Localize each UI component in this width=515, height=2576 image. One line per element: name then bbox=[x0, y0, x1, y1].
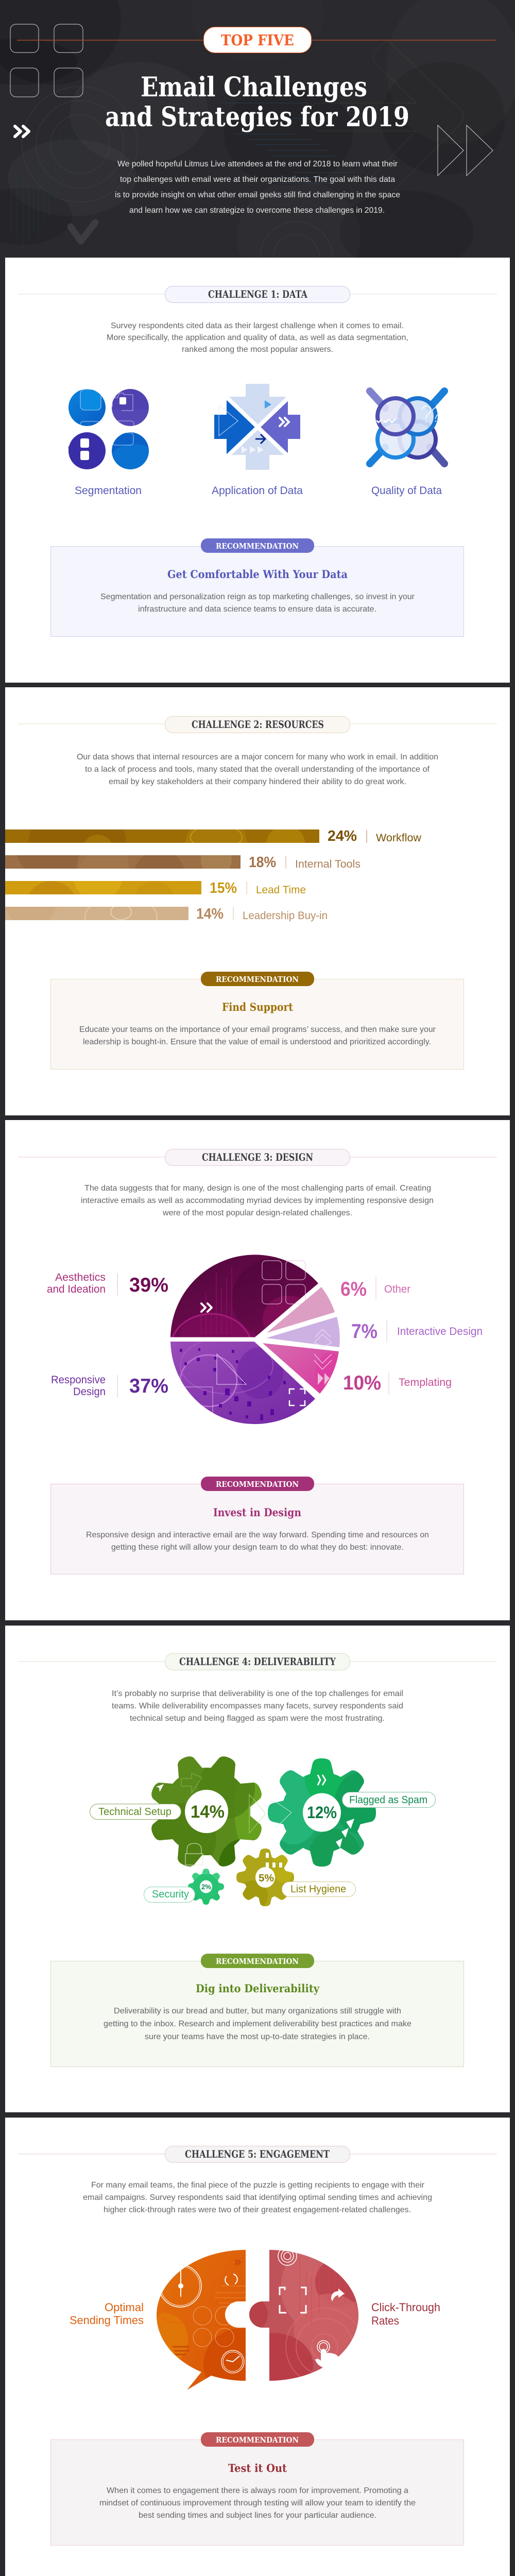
heading rule bbox=[17, 40, 496, 41]
pie chart bbox=[170, 1255, 344, 1424]
heading: challenge 2 bbox=[165, 716, 350, 733]
callout: recommendation 4: getting to the inbox. Research and implement deliverability best practices and make bbox=[104, 2020, 411, 2028]
intro text: top challenges with email were at their organizations. The goal with this data bbox=[120, 175, 395, 184]
heading: challenge 1 bbox=[165, 286, 350, 303]
slice: interactive design bbox=[266, 1317, 340, 1347]
label: click-through rates: Click-Through bbox=[371, 2301, 440, 2314]
callout: recommendation 1: Get Comfortable With Your Data bbox=[167, 568, 348, 581]
intro text: is to provide insight on what other email geeks still find challenging in the space bbox=[115, 191, 400, 199]
intro text bbox=[115, 160, 400, 215]
slice: other bbox=[267, 1287, 335, 1333]
label: other 6%: Other bbox=[384, 1283, 410, 1295]
callout: recommendation 5 bbox=[50, 2432, 464, 2545]
gear: security 2%: 2% bbox=[201, 1883, 212, 1891]
bar: lead time 15%: 15% bbox=[210, 880, 237, 896]
callout: recommendation 2: RECOMMENDATION bbox=[216, 975, 299, 984]
intro text: and learn how we can strategize to overcome these challenges in 2019. bbox=[129, 206, 385, 215]
text: challenge 3 intro: The data suggests that for many, design is one of the most challenging parts of email. Creating bbox=[84, 1184, 431, 1193]
bar: workflow 24%: Workflow bbox=[376, 832, 422, 844]
slice: responsive design bbox=[170, 1337, 315, 1424]
label: responsive design 37% bbox=[51, 1374, 168, 1398]
bar: leadership buy-in 14%: Leadership Buy-in bbox=[243, 910, 328, 922]
callout: recommendation 5: When it comes to engagement there is always room for improvement. Promoting a bbox=[107, 2486, 408, 2495]
panel: challenge 5 engagement bbox=[5, 2117, 510, 2576]
callout: recommendation 4: Dig into Deliverability bbox=[196, 1982, 320, 1995]
label: security bbox=[144, 1887, 195, 1902]
label: responsive design 37%: 37% bbox=[129, 1375, 168, 1397]
callout: recommendation 1 bbox=[50, 538, 464, 637]
callout: recommendation 3 bbox=[50, 1477, 464, 1574]
label: click-through rates: Rates bbox=[371, 2314, 399, 2327]
title: Email Challenges bbox=[141, 72, 367, 103]
icon: segmentation bbox=[68, 389, 149, 469]
label: other 6% bbox=[340, 1277, 410, 1300]
bar: internal tools 18%: Internal Tools bbox=[295, 858, 360, 870]
callout: recommendation 5: RECOMMENDATION bbox=[216, 2435, 299, 2445]
title bbox=[105, 72, 409, 133]
callout: recommendation 5: mindset of continuous improvement through testing will allow your team to identify the bbox=[99, 2499, 416, 2507]
label: templating 10% bbox=[343, 1372, 452, 1395]
label: security: Security bbox=[152, 1889, 189, 1900]
label: optimal sending times: Optimal bbox=[105, 2301, 144, 2314]
text: challenge 4 intro: technical setup and being flagged as spam were the most frustrating. bbox=[130, 1714, 385, 1723]
decorative icons: arrows on slices bbox=[314, 1329, 332, 1369]
bar: workflow 24% bbox=[5, 829, 421, 843]
label: interactive design 7%: 7% bbox=[351, 1320, 377, 1343]
panel: challenge 2 resources bbox=[5, 687, 510, 1115]
callout: recommendation 2 bbox=[50, 972, 464, 1070]
gear: technical setup 14%: 14% bbox=[191, 1802, 225, 1822]
label: aesthetics and ideation 39%: Aesthetics bbox=[55, 1272, 106, 1283]
label: quality of data: Quality of Data bbox=[371, 485, 442, 497]
gear: technical setup 14% bbox=[151, 1756, 266, 1867]
bubble: optimal sending times bbox=[157, 2250, 246, 2390]
label: list hygiene bbox=[282, 1882, 355, 1897]
text: challenge 2 intro: email by key stakeholders at their company hindered their ability to do great work. bbox=[109, 777, 406, 786]
heading: challenge 3 bbox=[165, 1149, 350, 1165]
text: challenge 3 intro bbox=[81, 1184, 434, 1217]
text: challenge 5 intro: For many email teams, the final piece of the puzzle is getting recipients to engage with their bbox=[91, 2181, 425, 2190]
bar: internal tools 18%: 18% bbox=[249, 854, 276, 871]
gear: security 2% bbox=[188, 1869, 224, 1905]
title: and Strategies for 2019 bbox=[105, 101, 409, 133]
heading: challenge 2: CHALLENGE 2: RESOURCES bbox=[192, 718, 324, 731]
text: challenge 5 intro: higher click-through rates were two of their greatest engagement-related challenges. bbox=[104, 2206, 411, 2214]
callout: recommendation 2: Find Support bbox=[222, 1001, 293, 1013]
text: challenge 1 intro: Survey respondents cited data as their largest challenge when it comes to email. bbox=[111, 321, 404, 330]
label: list hygiene: List Hygiene bbox=[290, 1884, 346, 1895]
label: flagged as spam bbox=[342, 1792, 436, 1807]
label: application of data: Application of Data bbox=[212, 485, 303, 497]
callout: recommendation 4: Deliverability is our bread and butter, but many organizations still struggle with bbox=[114, 2007, 401, 2015]
callout: recommendation 3: Invest in Design bbox=[213, 1506, 301, 1519]
bar: leadership buy-in 14%: 14% bbox=[196, 906, 224, 922]
badge: top five: TOP FIVE bbox=[221, 31, 294, 49]
bar chart bbox=[5, 829, 421, 921]
panel: challenge 1 data bbox=[5, 258, 510, 683]
bar: lead time 15%: Lead Time bbox=[256, 884, 306, 896]
icon: check mark bbox=[71, 223, 95, 241]
text: challenge 1 intro: ranked among the most popular answers. bbox=[182, 345, 333, 354]
heading: challenge 5 bbox=[165, 2146, 350, 2163]
text: challenge 4 intro: It’s probably no surprise that deliverability is one of the top challenges for email bbox=[112, 1689, 403, 1698]
text: challenge 3 intro: were of the most popular design-related challenges. bbox=[162, 1209, 352, 1217]
callout: recommendation 5: best sending times and subject lines for your particular audience. bbox=[139, 2511, 376, 2520]
callout: recommendation 3: RECOMMENDATION bbox=[216, 1480, 299, 1489]
text: challenge 4 intro bbox=[112, 1689, 403, 1723]
label: other 6%: 6% bbox=[340, 1278, 367, 1300]
icon: application of data bbox=[214, 384, 300, 470]
label: interactive design 7% bbox=[351, 1320, 483, 1343]
gear: flagged as spam 12% bbox=[268, 1758, 376, 1867]
text: challenge 1 intro: More specifically, the application and quality of data, as well as data segmentation, bbox=[107, 333, 408, 342]
icon: quality of data bbox=[370, 391, 444, 464]
callout: recommendation 1: infrastructure and data science teams to ensure data is accurate. bbox=[138, 605, 376, 614]
gear: list hygiene 5%: 5% bbox=[259, 1873, 274, 1884]
label: click-through rates bbox=[371, 2301, 440, 2327]
text: challenge 1 intro bbox=[107, 321, 408, 354]
panel: challenge 3 design bbox=[5, 1120, 510, 1620]
bar: internal tools 18% bbox=[5, 855, 360, 869]
label: aesthetics and ideation 39%: 39% bbox=[129, 1274, 168, 1296]
callout: recommendation 5: Test it Out bbox=[228, 2462, 287, 2475]
label: technical setup: Technical Setup bbox=[98, 1806, 171, 1818]
label: responsive design 37%: Design bbox=[73, 1386, 106, 1398]
label: aesthetics and ideation 39%: and Ideation bbox=[47, 1283, 106, 1295]
text: challenge 2 intro bbox=[77, 753, 438, 786]
text: challenge 5 intro bbox=[83, 2181, 432, 2214]
panel: challenge 4 deliverability bbox=[5, 1625, 510, 2112]
panel: header bbox=[0, 0, 515, 294]
callout: recommendation 4: sure your teams have the most up-to-date strategies in place. bbox=[145, 2032, 370, 2041]
label: optimal sending times: Sending Times bbox=[70, 2314, 144, 2327]
slice: templating bbox=[263, 1343, 339, 1394]
badge: top five bbox=[204, 27, 311, 53]
text: challenge 5 intro: email campaigns. Survey respondents said that identifying optimal sending times and achieving bbox=[83, 2193, 432, 2202]
callout: recommendation 1: Segmentation and personalization reign as top marketing challenges, so invest in your bbox=[100, 592, 415, 601]
bubble: click-through rates bbox=[249, 2250, 358, 2381]
text: challenge 3 intro: interactive emails as well as accommodating myriad devices by implementing responsive design bbox=[81, 1196, 434, 1205]
label: interactive design 7%: Interactive Design bbox=[397, 1326, 483, 1337]
callout: recommendation 3: Responsive design and interactive email are the way forward. Spending time and resources on bbox=[86, 1531, 429, 1539]
label: responsive design 37%: Responsive bbox=[51, 1374, 106, 1386]
text: challenge 4 intro: teams. While deliverability encompasses many facets, survey respondents said bbox=[112, 1702, 403, 1710]
callout: recommendation 2: Educate your teams on the importance of your email programs’ success, and then make sure your bbox=[79, 1025, 436, 1034]
icon: outline triangles bbox=[438, 125, 493, 176]
text: challenge 2 intro: Our data shows that internal resources are a major concern for many who work in email. In addition bbox=[77, 753, 438, 761]
text: challenge 2 intro: to a lack of process and tools, many stated that the overall understanding of the importance of bbox=[85, 765, 430, 774]
intro text: We polled hopeful Litmus Live attendees at the end of 2018 to learn what their bbox=[117, 160, 398, 168]
label: optimal sending times bbox=[70, 2301, 144, 2327]
heading: challenge 4 bbox=[165, 1654, 350, 1670]
heading: challenge 4: CHALLENGE 4: DELIVERABILITY bbox=[179, 1655, 336, 1668]
label: templating 10%: 10% bbox=[343, 1372, 381, 1394]
gear: list hygiene 5% bbox=[236, 1849, 294, 1906]
chart: speech bubble puzzle bbox=[157, 2250, 358, 2390]
callout: recommendation 4 bbox=[50, 1954, 464, 2067]
heading: challenge 1: CHALLENGE 1: DATA bbox=[208, 288, 307, 300]
callout: recommendation 3: getting these right will allow your design team to do what they do best: innovate. bbox=[111, 1543, 404, 1552]
label: technical setup bbox=[90, 1804, 181, 1820]
icon: chevrons bbox=[15, 126, 29, 137]
slice: aesthetics and ideation bbox=[170, 1255, 318, 1337]
callout: recommendation 2: leadership is bought-in. Ensure that the value of email is understood and prioritized accordingly. bbox=[83, 1038, 431, 1046]
bar: workflow 24%: 24% bbox=[328, 828, 357, 844]
bar: leadership buy-in 14% bbox=[5, 907, 327, 921]
callout: recommendation 1: RECOMMENDATION bbox=[216, 541, 299, 551]
label: templating 10%: Templating bbox=[399, 1377, 452, 1388]
heading: challenge 3: CHALLENGE 3: DESIGN bbox=[202, 1151, 313, 1163]
heading: challenge 5: CHALLENGE 5: ENGAGEMENT bbox=[185, 2148, 330, 2160]
label: segmentation: Segmentation bbox=[75, 485, 142, 497]
callout: recommendation 4: RECOMMENDATION bbox=[216, 1957, 299, 1966]
gears bbox=[90, 1756, 436, 1906]
icon: rounded squares bbox=[10, 24, 83, 97]
label: aesthetics and ideation 39% bbox=[47, 1272, 168, 1296]
label: flagged as spam: Flagged as Spam bbox=[349, 1794, 427, 1806]
bar: lead time 15% bbox=[5, 881, 306, 894]
gear: flagged as spam 12%: 12% bbox=[307, 1803, 337, 1822]
